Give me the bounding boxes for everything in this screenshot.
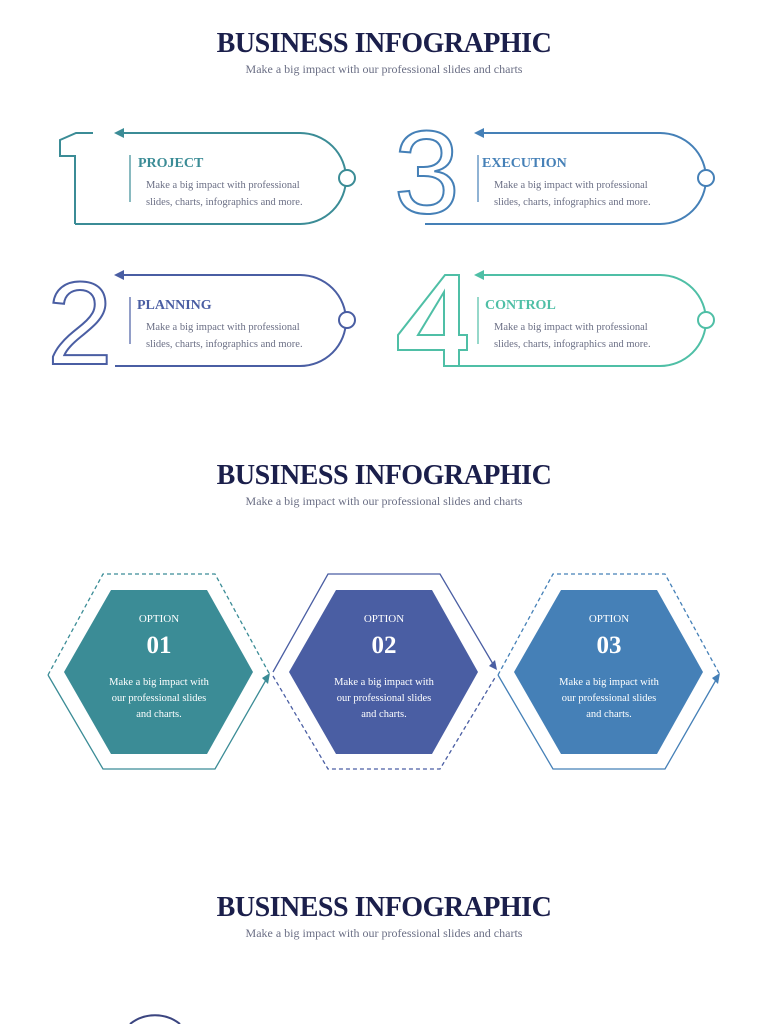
card: planning: Make a big impact with professional (146, 322, 300, 333)
hexagon: option 01 (48, 574, 270, 769)
card: execution: slides, charts, infographics and more. (494, 197, 651, 208)
card: project: slides, charts, infographics and more. (146, 197, 303, 208)
hexagon: option 01: 01 (146, 632, 172, 659)
card: control (398, 270, 714, 366)
title 3: BUSINESS INFOGRAPHIC (217, 892, 551, 923)
title 3 (217, 892, 551, 940)
hexagon: option 03: OPTION (589, 613, 629, 625)
hexagon: option 02: OPTION (364, 613, 404, 625)
card: project (60, 128, 355, 224)
title 1: BUSINESS INFOGRAPHIC (217, 28, 551, 59)
hexagon: option 01: Make a big impact with (109, 677, 210, 688)
hexagon: option 01: our professional slides (112, 693, 206, 704)
hexagon: option 02: 02 (372, 632, 396, 659)
title 2: Make a big impact with our professional slides and charts (246, 494, 523, 508)
card: control: CONTROL (485, 298, 556, 313)
card: project: PROJECT (138, 156, 204, 171)
card: control: Make a big impact with professional (494, 322, 648, 333)
card: project: Make a big impact with professional (146, 180, 300, 191)
card: planning (47, 258, 355, 390)
card: planning: PLANNING (137, 298, 212, 313)
hexagon: option 02: Make a big impact with (334, 677, 435, 688)
hexagon: option 02: and charts. (361, 709, 407, 720)
title 1 (217, 28, 551, 76)
digit 1 (60, 133, 93, 224)
title 2 (217, 460, 551, 508)
card: control: slides, charts, infographics and more. (494, 339, 651, 350)
title 3: Make a big impact with our professional slides and charts (246, 926, 523, 940)
hexagon: option 01: OPTION (139, 613, 179, 625)
title 1: Make a big impact with our professional slides and charts (246, 62, 523, 76)
card: planning: slides, charts, infographics and more. (146, 339, 303, 350)
partial circle (130, 1015, 180, 1024)
hexagon: option 02 (273, 574, 497, 769)
title 2: BUSINESS INFOGRAPHIC (217, 460, 551, 491)
digit 3: 3 (394, 107, 460, 239)
card: execution: EXECUTION (482, 156, 567, 171)
hexagon: option 03 (498, 574, 720, 769)
hexagon: option 02: our professional slides (337, 693, 431, 704)
hexagon: option 03: our professional slides (562, 693, 656, 704)
card: execution: Make a big impact with professional (494, 180, 648, 191)
card: execution (394, 107, 714, 239)
hexagon: option 03: Make a big impact with (559, 677, 660, 688)
hexagon: option 03: and charts. (586, 709, 632, 720)
hexagon: option 03: 03 (596, 632, 622, 659)
hexagon: option 01: and charts. (136, 709, 182, 720)
digit 4 (398, 275, 467, 366)
digit 2: 2 (47, 258, 113, 390)
